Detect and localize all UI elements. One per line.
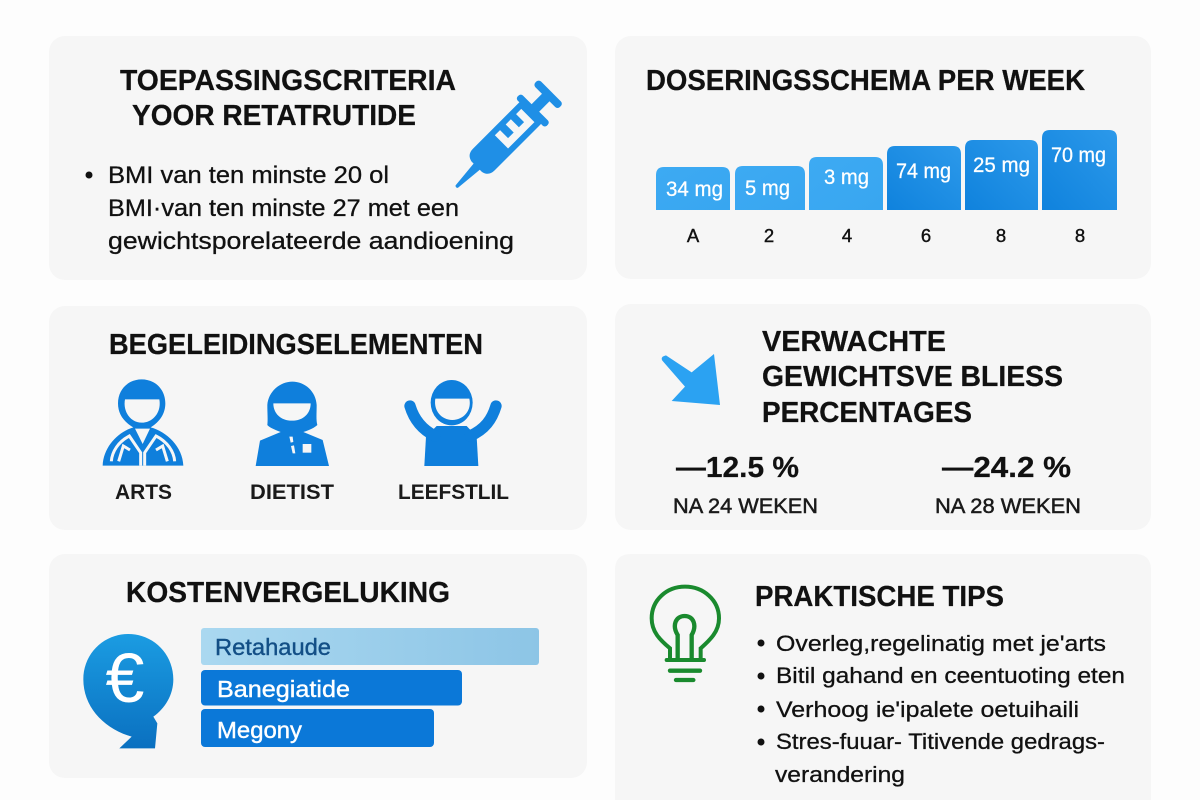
- criteria list: BMI·van ten minste 27 met een: [108, 195, 459, 222]
- label: leefstijl: LEEFSTLIL: [398, 481, 509, 504]
- heading: doseringsschema: DOSERINGSSCHEMA PER WEEK: [646, 65, 1085, 97]
- label: arts: ARTS: [115, 481, 172, 504]
- criteria list: gewichtsporelateerde aandioening: [108, 228, 514, 255]
- heading: toepassingscriteria: YOOR RETATRUTIDE: [132, 100, 416, 132]
- bar chart: cost comparison: Retahaude: [215, 634, 331, 660]
- stat: 28 weken: [935, 452, 1081, 518]
- panel: kostenvergelijking: [49, 554, 587, 778]
- bar chart: dosage: 8: [996, 225, 1006, 246]
- bar chart: dosage: 34 mg: [666, 178, 723, 201]
- icon: euro bubble: [83, 634, 173, 748]
- bar chart: dosage: 8: [1075, 225, 1085, 246]
- bar chart: dosage: A: [687, 225, 700, 246]
- tips list: verandering: [775, 762, 905, 787]
- panel: toepassingscriteria: [49, 36, 587, 280]
- bar chart: cost comparison: Megony: [217, 717, 303, 743]
- tips list: Overleg,regelinatig met je'arts: [776, 631, 1106, 656]
- tips list: Bitil gahand en ceentuoting eten: [776, 663, 1125, 688]
- stat: 24 weken: NA 24 WEKEN: [673, 495, 818, 518]
- tips list: [758, 631, 1125, 787]
- icon: leefstijl: [410, 380, 496, 466]
- heading: begeleidingselementen: BEGELEIDINGSELEMENTEN: [109, 329, 483, 361]
- icon: arrow down-right: [662, 354, 720, 405]
- icon: dietist: [256, 382, 329, 466]
- heading: toepassingscriteria: TOEPASSINGSCRITERIA: [120, 65, 456, 97]
- tips list: Stres-fuuar- Titivende gedrags-: [776, 729, 1105, 754]
- heading: verwachte gewichtsverlies: [762, 326, 1063, 429]
- stat: 24 weken: —12.5 %: [676, 452, 799, 484]
- icon: arts: [103, 379, 183, 466]
- bar chart: dosage: 5 mg: [745, 177, 790, 200]
- heading: verwachte gewichtsverlies: VERWACHTE: [762, 326, 946, 358]
- icon: light bulb: [652, 587, 719, 680]
- bar chart: dosage: [656, 130, 1117, 246]
- bar chart: dosage: 3 mg: [824, 166, 869, 189]
- panel: praktische tips: [615, 554, 1151, 800]
- panel: doseringsschema: [615, 36, 1151, 279]
- panel: gewichtsverlies: [615, 304, 1151, 530]
- panel: begeleidingselementen: [49, 306, 587, 530]
- bar chart: cost comparison: [201, 628, 539, 747]
- criteria list: [86, 162, 514, 255]
- bar chart: dosage: 2: [764, 225, 774, 246]
- heading: toepassingscriteria: [120, 65, 456, 132]
- heading: praktische tips: PRAKTISCHE TIPS: [755, 581, 1004, 613]
- bar chart: dosage: 74 mg: [896, 160, 951, 183]
- bar chart: dosage: 70 mg: [1051, 144, 1106, 167]
- heading: verwachte gewichtsverlies: PERCENTAGES: [762, 397, 972, 429]
- stat: 28 weken: —24.2 %: [942, 452, 1071, 484]
- bar chart: cost comparison: Banegiatide: [217, 676, 350, 702]
- tips list: Verhoog ie'ipalete oetuihaili: [776, 697, 1079, 722]
- bar chart: dosage: 25 mg: [973, 154, 1030, 177]
- bar chart: dosage: 4: [842, 225, 852, 246]
- bar chart: dosage: 6: [921, 225, 931, 246]
- label: dietist: DIETIST: [250, 481, 334, 504]
- criteria list: BMI van ten minste 20 ol: [108, 162, 389, 189]
- heading: kostenvergelijking: KOSTENVERGELUKING: [126, 577, 450, 609]
- stat: 28 weken: NA 28 WEKEN: [935, 495, 1081, 518]
- heading: verwachte gewichtsverlies: GEWICHTSVE BLIESS: [762, 361, 1063, 393]
- stat: 24 weken: [673, 452, 818, 518]
- icon: euro bubble: €: [106, 639, 144, 717]
- icon: syringe: [441, 77, 566, 202]
